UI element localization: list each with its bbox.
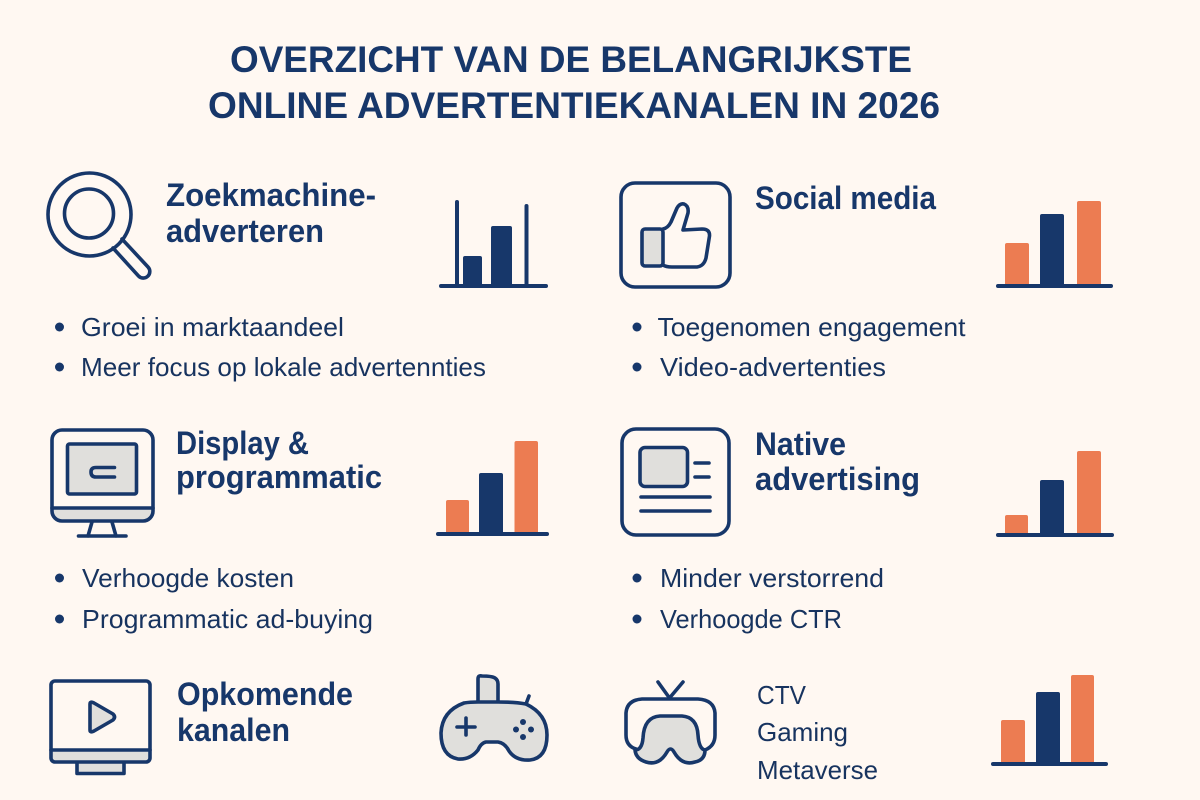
panel: zoekmachine-adverteren bbox=[48, 173, 548, 382]
icon: magnifying glass bbox=[48, 173, 150, 278]
bullet list: social media: Toegenomen engagement bbox=[658, 312, 966, 342]
icon: article with image bbox=[622, 429, 729, 535]
icon: thumbs up bbox=[621, 183, 730, 287]
heading: opkomende kanalen: Opkomende bbox=[177, 676, 353, 712]
bullet list: social media: Video-advertenties bbox=[660, 352, 886, 382]
bullet list: native: Verhoogde CTR bbox=[660, 604, 842, 634]
bullet list: zoekmachine: Groei in marktaandeel bbox=[81, 312, 344, 342]
heading: zoekmachine-adverteren: Zoekmachine- bbox=[166, 177, 376, 213]
heading: display & programmatic: programmatic bbox=[176, 459, 382, 495]
bullet list: display bbox=[55, 563, 373, 634]
bar chart: zoekmachine bbox=[439, 200, 548, 288]
heading: zoekmachine-adverteren: adverteren bbox=[166, 213, 324, 249]
bar chart: social media bbox=[996, 201, 1113, 288]
icon: game controller bbox=[441, 676, 547, 760]
heading: zoekmachine-adverteren bbox=[166, 177, 376, 249]
panel: ctv, gaming, metaverse bbox=[626, 675, 1108, 785]
heading: opkomende kanalen bbox=[177, 676, 353, 748]
icon: desktop monitor bbox=[52, 430, 153, 536]
panel: native advertising bbox=[622, 426, 1114, 634]
title: ONLINE ADVERTENTIEKANALEN IN 2026 bbox=[208, 84, 940, 126]
title: OVERZICHT VAN DE BELANGRIJKSTE bbox=[230, 38, 912, 80]
bullet list: social media bbox=[632, 312, 966, 382]
text list: ctv gaming metaverse: Metaverse bbox=[757, 755, 878, 785]
bar chart: native bbox=[996, 451, 1114, 537]
text list: ctv gaming metaverse: Gaming bbox=[757, 717, 848, 747]
text list: ctv gaming metaverse: CTV bbox=[757, 680, 807, 710]
bar chart: emerging bbox=[991, 675, 1108, 766]
panel: opkomende kanalen bbox=[51, 676, 547, 774]
bullet list: native bbox=[632, 563, 884, 634]
icon: video screen bbox=[51, 681, 150, 774]
text list: ctv gaming metaverse bbox=[757, 680, 878, 785]
bullet list: native: Minder verstorrend bbox=[660, 563, 884, 593]
heading: native advertising: Native bbox=[755, 426, 846, 462]
icon: vr headset with antenna bbox=[626, 682, 715, 763]
heading: opkomende kanalen: kanalen bbox=[177, 712, 290, 748]
heading: social media: Social media bbox=[755, 180, 936, 216]
bullet list: zoekmachine bbox=[55, 312, 486, 382]
bar chart: display bbox=[436, 441, 549, 536]
bullet list: zoekmachine: Meer focus op lokale advertennties bbox=[81, 352, 486, 382]
bullet list: display: Programmatic ad-buying bbox=[82, 604, 373, 634]
bullet list: display: Verhoogde kosten bbox=[82, 563, 294, 593]
panel: display & programmatic bbox=[52, 425, 549, 634]
heading: display & programmatic bbox=[176, 425, 382, 495]
heading: native advertising bbox=[755, 426, 920, 497]
heading: native advertising: advertising bbox=[755, 461, 920, 497]
panel: social media bbox=[621, 180, 1113, 382]
heading: display & programmatic: Display & bbox=[176, 425, 309, 461]
title bbox=[208, 38, 940, 126]
